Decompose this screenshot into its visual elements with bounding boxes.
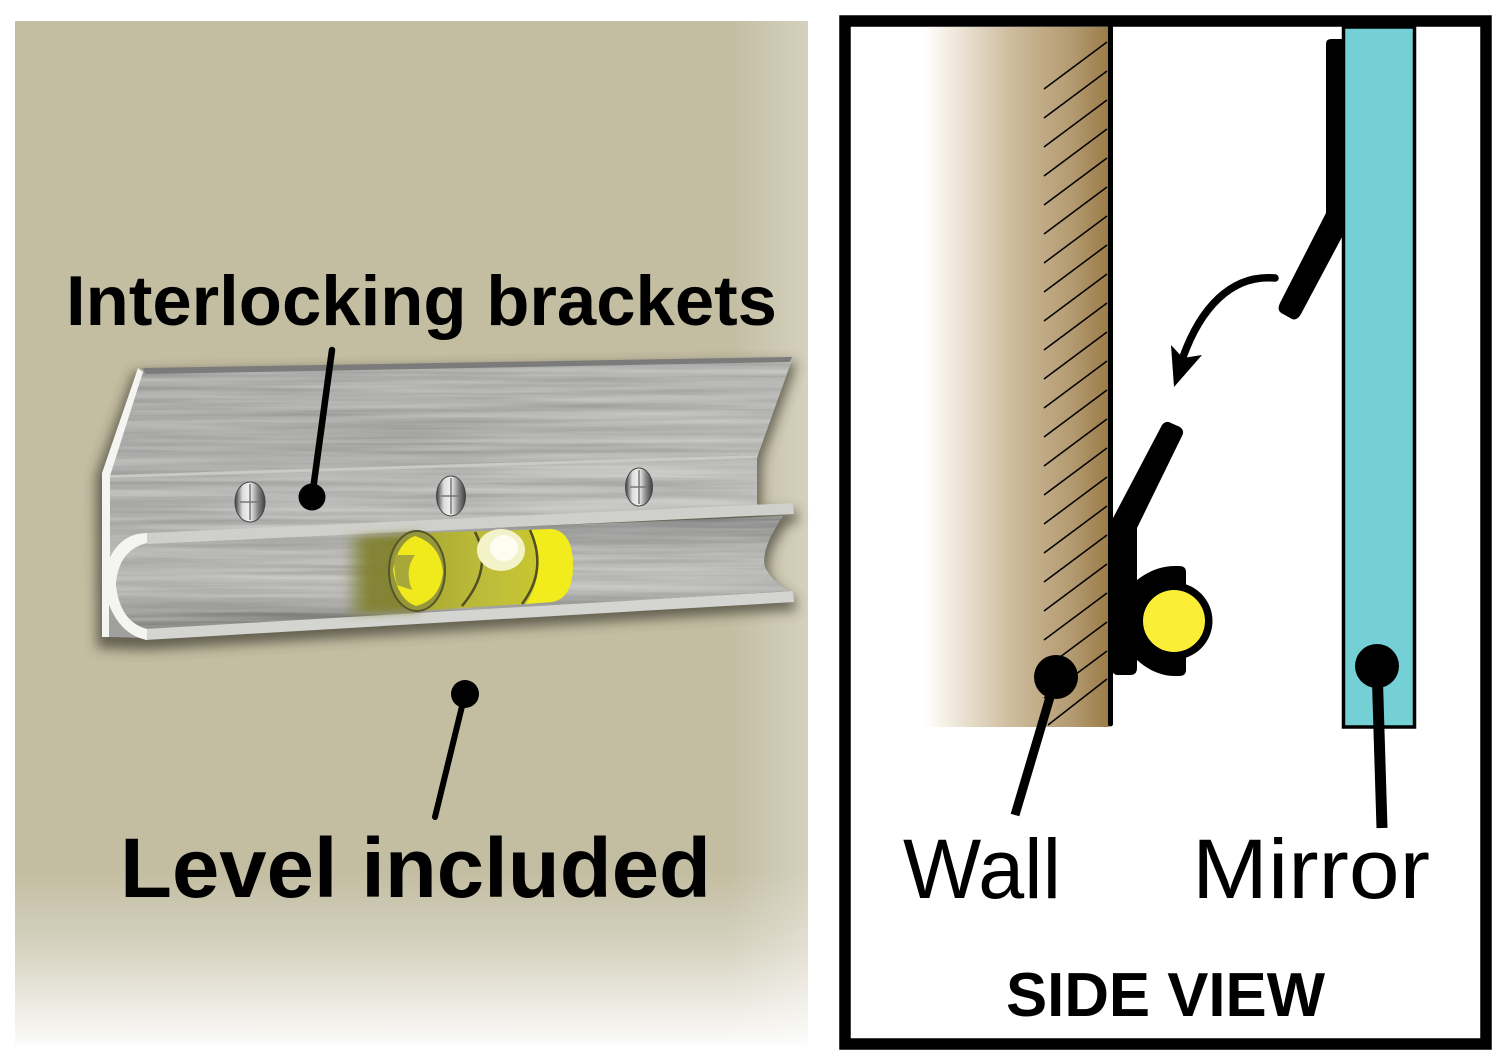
leader: interlocking brackets xyxy=(298,350,332,510)
channel interior xyxy=(116,516,790,630)
upper plate top edge xyxy=(143,357,792,374)
wall bracket with level xyxy=(1112,422,1212,676)
screw 1 xyxy=(235,482,265,522)
mirror bracket xyxy=(1279,39,1342,319)
yellow level circle xyxy=(1143,590,1205,652)
wall xyxy=(925,27,1110,727)
lower plate xyxy=(108,458,757,562)
bottom lip xyxy=(145,591,794,640)
spirit level xyxy=(343,529,573,615)
caption: side view: SIDE VIEW xyxy=(1006,961,1325,1030)
diagram frame xyxy=(845,21,1486,1044)
mirror xyxy=(1344,27,1414,727)
panel background xyxy=(15,21,808,1045)
label: wall: Wall xyxy=(903,822,1061,916)
screw 2 xyxy=(436,476,466,516)
left white edge xyxy=(102,368,143,562)
top lip xyxy=(147,503,794,544)
level inner window xyxy=(393,536,443,606)
wall hatching xyxy=(1044,42,1107,725)
label: mirror: Mirror xyxy=(1192,822,1430,916)
heading: level included: Level included xyxy=(120,821,711,915)
leader: wall xyxy=(1015,655,1078,815)
crease highlight xyxy=(110,455,758,479)
metal bracket xyxy=(102,357,794,640)
bracket drop shadow xyxy=(96,362,797,650)
white vertical flange xyxy=(102,473,109,637)
white curved edge xyxy=(108,533,147,640)
panel: bracket illustration xyxy=(15,21,808,1045)
upper plate xyxy=(108,357,793,476)
lower left gap under curve xyxy=(108,602,145,638)
screw 3 xyxy=(626,468,652,506)
leader: mirror xyxy=(1355,644,1399,828)
panel: side view diagram xyxy=(845,21,1486,1044)
heading: interlocking brackets: Interlocking brackets xyxy=(66,261,777,340)
arrow: bracket drops down xyxy=(1171,278,1275,387)
leader: level included xyxy=(435,680,479,817)
